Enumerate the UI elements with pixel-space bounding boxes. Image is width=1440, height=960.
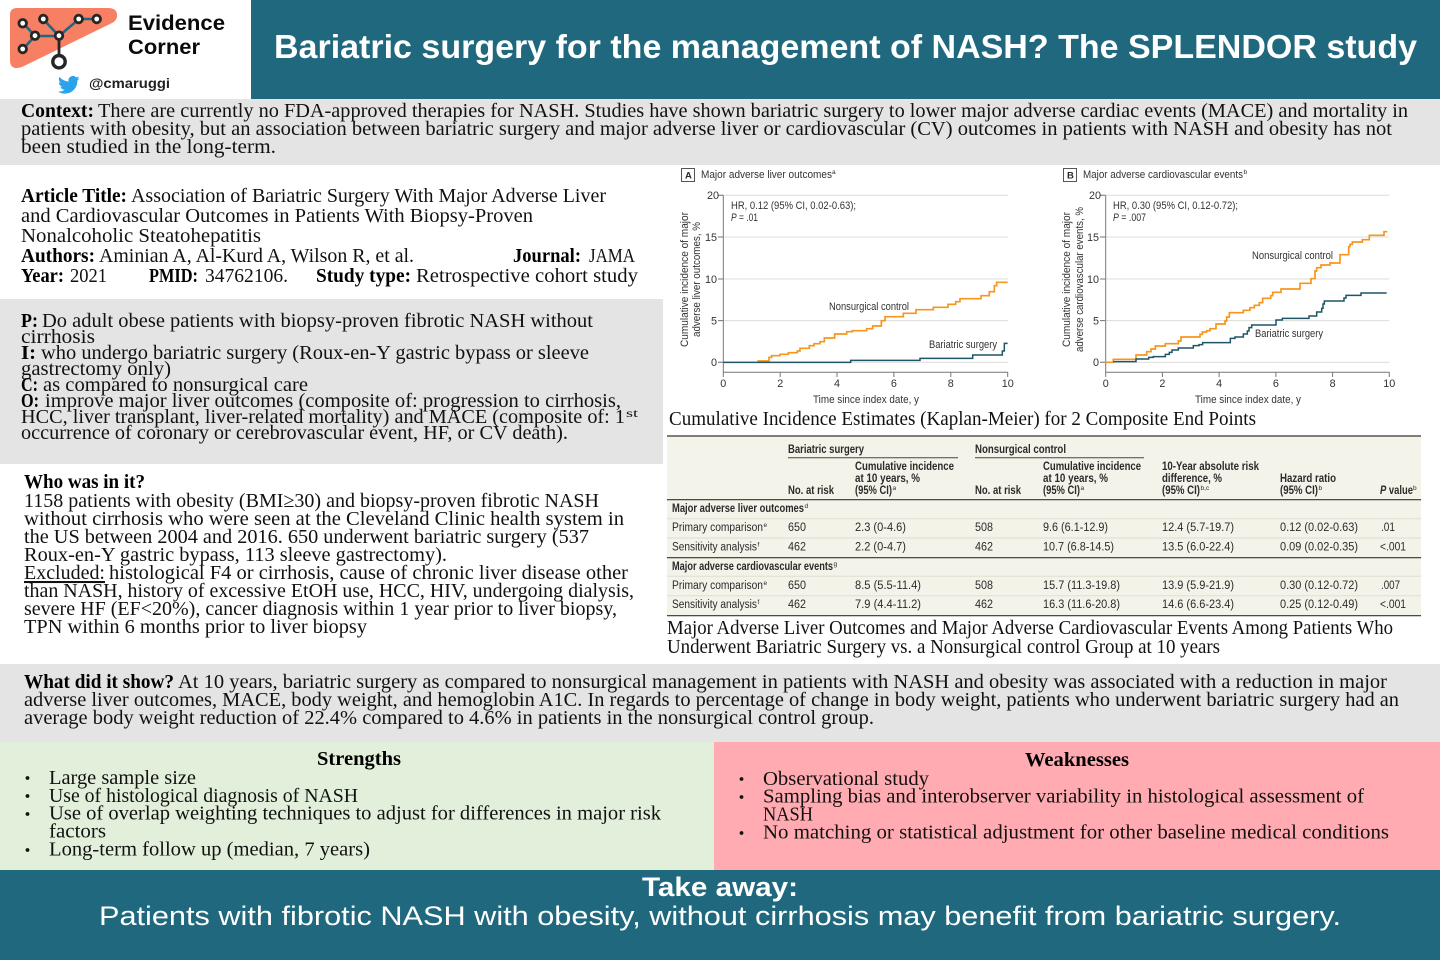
liver outcomes rows: Sensitivity analysis [672,542,757,554]
cardiovascular events rows: Sensitivity analysis [672,599,757,611]
panel: article details: PMID: [149,265,198,287]
chart A axes and grid: 0 [720,378,726,390]
cardiovascular events rows: f [758,599,760,606]
panel: PICO question: P: [21,310,38,332]
panel: PICO question: C: [21,374,38,396]
chart B axes and grid: 5 [1093,316,1099,328]
table header: b [1413,485,1417,492]
panel: weaknesses [714,742,1440,870]
chart A axes and grid: 0 [711,357,717,369]
chart B annotations: HR, 0.30 (95% CI, 0.12-0.72); [1113,200,1238,212]
table header: (95% CI) [1280,485,1318,497]
cardiovascular events rows: 13.9 (5.9-21.9) [1162,580,1234,592]
chart A axes and grid: 8 [948,378,954,390]
table header: 10-Year absolute risk [1162,461,1260,473]
panel: who was in it: without cirrhosis who were seen at the Cleveland Clinic health system in [24,508,624,530]
table header: Nonsurgical control [975,444,1066,456]
cardiovascular events rows: 0.25 (0.12-0.49) [1280,599,1358,611]
liver outcomes rows: Primary comparison [672,522,763,534]
table header: b,c [1200,485,1210,492]
panel: what did it show: At 10 years, bariatric surgery as compared to nonsurgical management in patients with NASH and obesity was associated with a reduction in major [178,671,1387,693]
chart A axes and grid: 2 [777,378,783,390]
chart A axes and grid: adverse liver outcomes, % [691,222,703,337]
chart B axes and grid: 6 [1273,378,1279,390]
panel: who was in it: 1158 patients with obesity (BMI≥30) and biopsy-proven fibrotic NASH [24,490,599,512]
weaknesses list [740,768,1389,844]
chart A bariatric curve [723,343,1008,362]
weaknesses list: Sampling bias and interobserver variability in histological assessment of [763,786,1364,808]
chart B axes and grid: 10 [1087,274,1099,286]
strengths list: Use of histological diagnosis of NASH [49,785,358,807]
liver outcomes rows: 13.5 (6.0-22.4) [1162,542,1234,554]
liver outcomes rows: 650 [788,522,806,534]
panel: article details: Aminian A, Al-Kurd A, Wilson R, et al. [99,245,414,267]
panel: strengths [0,742,714,870]
table caption [667,617,1393,658]
table header: P value [1380,485,1413,497]
chart B axes and grid [1061,190,1395,406]
panel: who was in it: than NASH, history of excessive EtOH use, HCC, HIV, undergoing dialysis, [24,580,634,602]
liver outcomes rows: 462 [975,542,993,554]
panel: article details: Study type: [316,265,411,287]
title banner [251,0,1440,99]
chart B axes and grid: 8 [1330,378,1336,390]
take away message: Patients with fibrotic NASH with obesity, without cirrhosis may benefit from bariatric surgery. [99,901,1341,931]
chart A panel label: Major adverse liver outcomes [701,169,833,181]
panel: what did it show: What did it show? [24,671,174,693]
cardiovascular events rows: e [764,580,768,587]
panel: who was in it: TPN within 6 months prior to liver biopsy [24,616,368,638]
panel: article details: and Cardiovascular Outcomes in Patients With Biopsy-Proven [21,205,533,227]
chart A axes and grid: 20 [707,190,719,202]
liver outcomes rows: .01 [1381,522,1395,534]
panel: context: been studied in the long-term. [21,136,276,158]
panel: article details: Nonalcoholic Steatohepatitis [21,225,261,247]
weaknesses list: No matching or statistical adjustment for other baseline medical conditions [763,822,1389,844]
panel: what did it show [0,664,1440,742]
panel: article details: Year: [21,265,64,287]
table header: Hazard ratio [1280,473,1336,485]
table header: b [1318,485,1322,492]
panel: PICO question: cirrhosis [21,326,95,348]
panel: article details: Article Title: [21,185,127,207]
panel: who was in it [24,471,634,638]
liver outcomes rows: 10.7 (6.8-14.5) [1043,542,1114,554]
title: Bariatric surgery for the management of NASH? The SPLENDOR study [274,28,1418,65]
panel: who was in it: Roux-en-Y gastric bypass, 113 sleeve gastrectomy). [24,544,447,566]
chart B axes and grid: 20 [1089,190,1101,202]
panel: PICO question: as compared to nonsurgical care [43,374,308,396]
chart B nonsurgical curve [1106,232,1387,362]
table header: (95% CI) [1043,485,1080,497]
liver outcomes rows: Major adverse liver outcomes [672,503,804,515]
panel: PICO question: who undergo bariatric surgery (Roux-en-Y gastric bypass or sleeve [41,342,589,364]
chart A nonsurgical curve [757,282,1008,361]
table header: No. at risk [975,485,1021,497]
chart A panel label: a [832,169,836,176]
cardiovascular events rows: 8.5 (5.5-11.4) [855,580,921,592]
panel: context: Context: [21,100,94,122]
panel: article details: Association of Bariatric Surgery With Major Adverse Liver [131,185,606,207]
chart A axes and grid: 15 [705,232,717,244]
chart B annotations: Bariatric surgery [1255,328,1324,340]
panel: PICO question: improve major liver outcomes (composite of: progression to cirrhosis, [45,390,621,412]
chart A axes and grid: Time since index date, y [813,394,920,406]
panel: PICO question: I: [21,342,36,364]
liver outcomes rows: 2.2 (0-4.7) [855,542,906,554]
chart A axes and grid [679,190,1014,406]
panel: article details: Retrospective cohort study [416,265,639,287]
cardiovascular events rows: 0.30 (0.12-0.72) [1280,580,1358,592]
panel: what did it show: average body weight reduction of 22.4% compared to 4.6% in patients in the nonsurgical control group. [24,707,874,729]
chart A annotations: P = .01 [731,212,758,224]
strengths list: Large sample size [49,767,196,789]
icon: liver network logo [10,8,117,68]
liver outcomes rows [672,503,1406,554]
table header: a [1080,485,1084,492]
table header: No. at risk [788,485,834,497]
panel: article details: Journal: [513,245,581,267]
chart B axes and grid: 4 [1216,378,1222,390]
chart A axes and grid: 5 [711,316,717,328]
cardiovascular events rows: .007 [1381,580,1400,592]
results table [667,436,1421,616]
panel: who was in it: the US between 2004 and 2016. 650 underwent bariatric surgery (537 [24,526,589,548]
liver outcomes rows: e [764,522,768,529]
liver outcomes rows: 12.4 (5.7-19.7) [1162,522,1234,534]
strengths list: Use of overlap weighting techniques to adjust for differences in major risk [49,802,662,824]
table header: (95% CI) [1162,485,1200,497]
panel: article details: 2021 [70,265,107,287]
table header: Cumulative incidence [855,461,954,473]
strengths list: Long-term follow up (median, 7 years) [49,838,370,860]
chart A axes and grid: 10 [1002,378,1014,390]
cardiovascular events rows: 14.6 (6.6-23.4) [1162,599,1234,611]
table header: at 10 years, % [1043,473,1108,485]
panel: PICO question [0,299,663,464]
chart A: major adverse liver outcomes [679,168,1014,406]
logo: Evidence Corner [10,8,225,94]
chart caption: Cumulative Incidence Estimates (Kaplan-Meier) for 2 Composite End Points [669,408,1256,430]
chart B axes and grid: adverse cardiovascular events, % [1074,207,1086,352]
liver outcomes rows: <.001 [1380,542,1406,554]
take away heading: Take away: [642,872,798,902]
strengths list: factors [49,820,106,842]
chart B axes and grid: 2 [1159,378,1165,390]
panel: PICO question: Do adult obese patients with biopsy-proven fibrotic NASH without [42,310,593,332]
cardiovascular events rows: 650 [788,580,806,592]
table header: at 10 years, % [855,473,920,485]
liver outcomes rows: d [804,503,808,510]
chart A annotations: Nonsurgical control [829,301,909,313]
cardiovascular events rows: Major adverse cardiovascular events [672,561,833,573]
table caption: Underwent Bariatric Surgery vs. a Nonsurgical control Group at 10 years [667,636,1220,658]
table header: Bariatric surgery [788,444,864,456]
chart A annotations: Bariatric surgery [929,339,998,351]
cardiovascular events rows: 462 [788,599,806,611]
strengths heading: Strengths [317,748,401,770]
panel: context: There are currently no FDA-approved therapies for NASH. Studies have shown bariatric surgery to lower major adverse cardiac events (MACE) and mortality in [98,100,1408,122]
chart A axes and grid: Cumulative incidence of major [679,212,691,347]
strengths list [26,767,662,860]
chart B panel label: B [1067,170,1074,182]
chart B panel label: b [1244,169,1248,176]
chart B axes and grid: Cumulative incidence of major [1061,212,1073,347]
panel: take away [0,870,1440,960]
liver outcomes rows: 2.3 (0-4.6) [855,522,906,534]
cardiovascular events rows: g [834,561,838,568]
cardiovascular events rows: 15.7 (11.3-19.8) [1043,580,1120,592]
weaknesses list: Observational study [763,768,930,790]
table header: Cumulative incidence [1043,461,1141,473]
chart A axes and grid: 6 [891,378,897,390]
chart B bariatric curve [1113,293,1387,362]
panel: article details: Authors: [21,245,95,267]
panel: who was in it: Who was in it? [24,471,145,493]
panel: who was in it: histological F4 or cirrhosis, cause of chronic liver disease other [109,562,628,584]
chart B annotations: Nonsurgical control [1252,250,1333,262]
chart A annotations: HR, 0.12 (95% CI, 0.02-0.63); [731,200,856,212]
panel: article details [21,185,639,287]
panel: PICO question: HCC, liver transplant, liver-related mortality) and MACE (composite of: 1 [21,406,625,428]
cardiovascular events rows: 508 [975,580,993,592]
cardiovascular events rows: 16.3 (11.6-20.8) [1043,599,1120,611]
panel: PICO question: occurrence of coronary or cerebrovascular event, HF, or CV death). [21,422,568,444]
liver outcomes rows: 462 [788,542,806,554]
twitter handle: @cmaruggi [89,75,170,91]
table caption: Major Adverse Liver Outcomes and Major Adverse Cardiovascular Events Among Patients Who [667,617,1393,639]
table header: a [892,485,896,492]
chart A panel label: A [685,170,692,182]
panel: article details: JAMA [589,245,635,267]
weaknesses heading: Weaknesses [1025,749,1129,771]
panel: PICO question: O: [21,390,39,412]
weaknesses list: NASH [763,804,813,826]
icon: twitter bird [58,76,80,94]
chart B axes and grid: 0 [1103,378,1109,390]
cardiovascular events rows: <.001 [1380,599,1406,611]
panel: context: patients with obesity, but an association between bariatric surgery and major adverse liver or cardiovascular (CV) outcomes in patients with NASH and obesity has not [21,118,1392,140]
liver outcomes rows: 0.09 (0.02-0.35) [1280,542,1358,554]
logo wordmark: Evidence [128,12,225,35]
panel: who was in it: severe HF (EF<20%), cancer diagnosis within 1 year prior to liver biopsy, [24,598,617,620]
chart B axes and grid: 10 [1383,378,1395,390]
panel: what did it show: adverse liver outcomes, MACE, body weight, and hemoglobin A1C. In regards to percentage of change in body weight, patients who underwent bariatric surgery had an [24,689,1399,711]
logo wordmark [128,12,225,59]
chart A axes and grid: 10 [705,274,717,286]
chart A annotations [731,200,998,351]
panel: PICO question: st [626,406,639,420]
liver outcomes rows: f [758,542,760,548]
cardiovascular events rows: 462 [975,599,993,611]
chart B axes and grid: 0 [1093,357,1099,369]
chart B axes and grid: 15 [1087,232,1099,244]
panel: who was in it: Excluded: [24,562,105,584]
chart B annotations: P = .007 [1113,212,1146,224]
chart B axes and grid: Time since index date, y [1195,394,1302,406]
chart B panel label: Major adverse cardiovascular events [1083,169,1244,181]
table header: difference, % [1162,473,1222,485]
panel: PICO question: gastrectomy only) [21,358,171,380]
chart B: major adverse cardiovascular events [1061,168,1395,406]
logo wordmark: Corner [128,36,200,59]
cardiovascular events rows: 7.9 (4.4-11.2) [855,599,921,611]
liver outcomes rows: 9.6 (6.1-12.9) [1043,522,1108,534]
chart A axes and grid: 4 [834,378,840,390]
cardiovascular events rows: Primary comparison [672,580,763,592]
liver outcomes rows: 508 [975,522,993,534]
panel: context [0,99,1440,165]
liver outcomes rows: 0.12 (0.02-0.63) [1280,522,1358,534]
panel: article details: 34762106. [205,265,288,287]
table header [788,444,1417,497]
table header: (95% CI) [855,485,892,497]
cardiovascular events rows [672,561,1406,611]
chart B annotations [1113,200,1333,340]
